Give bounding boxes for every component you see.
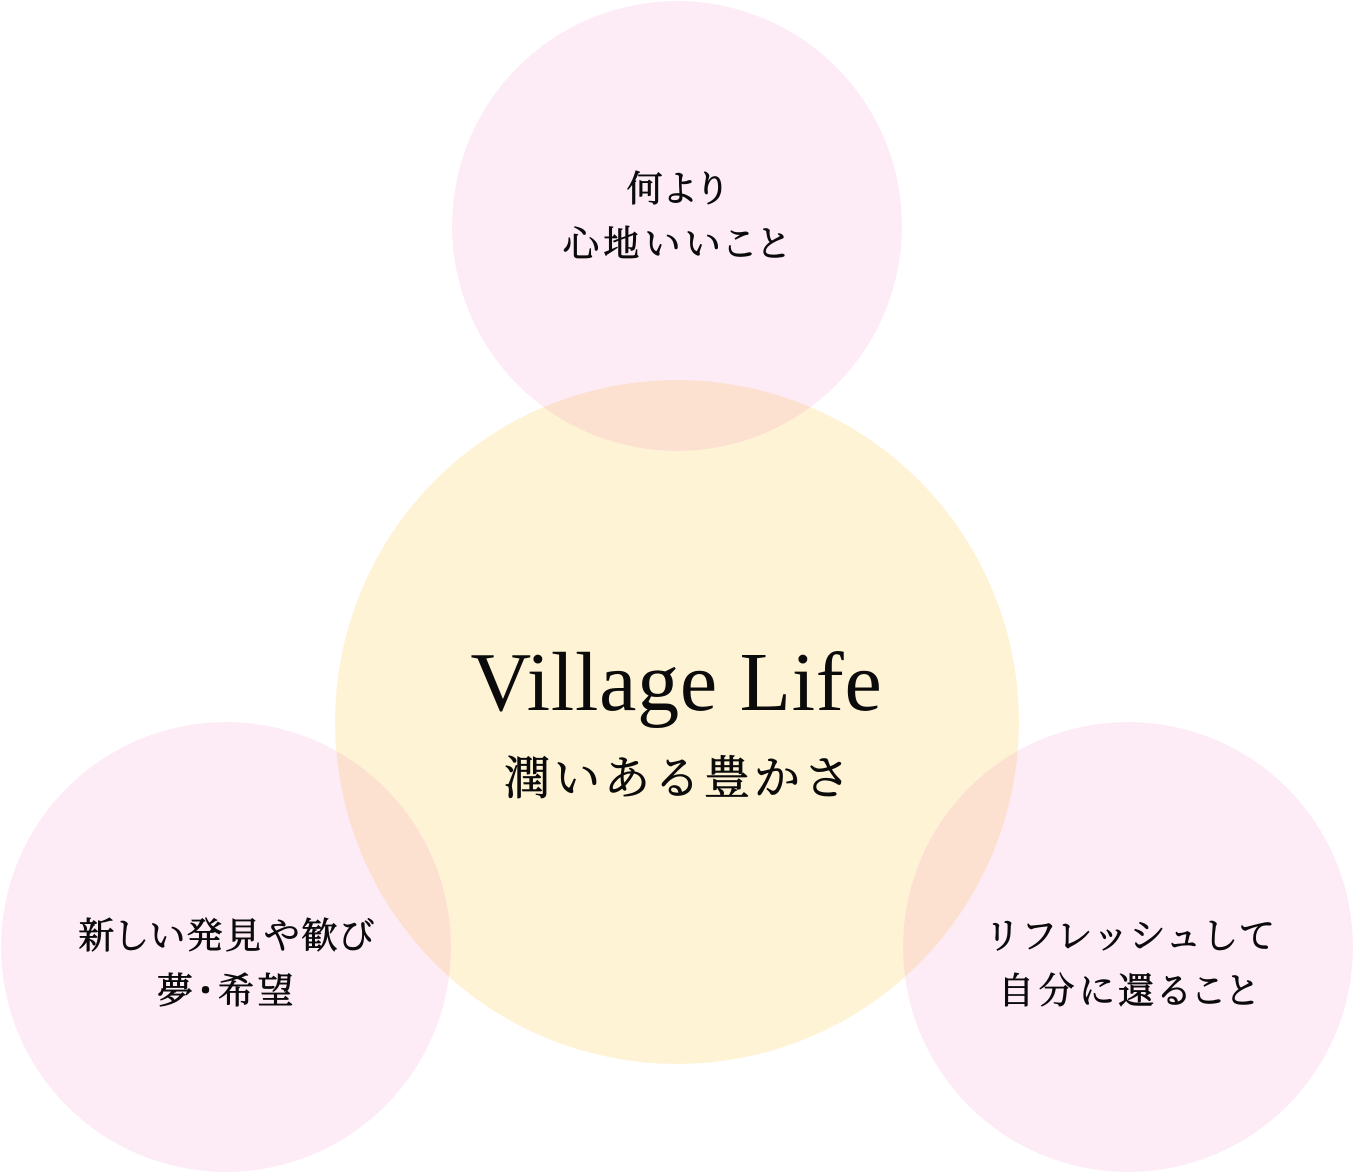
label: top circle [563, 169, 793, 264]
circle: bottom right [903, 722, 1353, 1172]
subheading: 潤いある豊かさ [504, 753, 854, 804]
circle: top [452, 1, 902, 451]
label: bottom left circle: 夢・希望 [157, 971, 297, 1011]
circle: bottom left [1, 722, 451, 1172]
heading: Village Life: Village Life [470, 636, 883, 729]
label: bottom right circle: リフレッシュして [984, 916, 1276, 956]
label: bottom right circle: 自分に還ること [998, 971, 1262, 1011]
label: bottom right circle [984, 916, 1276, 1011]
label: bottom left circle: 新しい発見や歓び [78, 916, 376, 956]
label: bottom left circle [78, 916, 376, 1011]
label: top circle: 心地いいこと [563, 224, 793, 264]
circle overlaps [336, 380, 1018, 977]
label: top circle: 何より [627, 169, 729, 209]
circle: centre Village Life [335, 380, 1019, 1064]
